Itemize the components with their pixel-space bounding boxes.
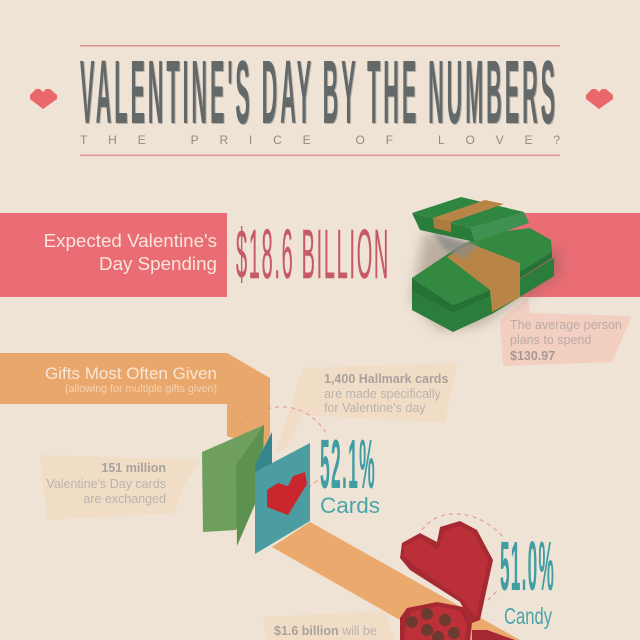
icon: heart candy box — [400, 521, 515, 640]
icon: stacks of money — [412, 197, 560, 332]
chocolates — [406, 608, 460, 640]
callout: 151 million: are exchanged — [83, 492, 166, 506]
gifts label: (allowing for multiple gifts given) — [65, 383, 217, 395]
icon: greeting card — [202, 425, 310, 554]
stat: cards percentage: Cards — [320, 493, 380, 518]
panel: gifts ribbon — [0, 353, 270, 450]
text: 52.1% — [320, 425, 376, 503]
upper stack — [412, 197, 529, 242]
gifts label — [45, 364, 217, 395]
callout: 151 million: Valentine's Day cards — [46, 477, 166, 491]
subtitle: THE PRICE OF LOVE? — [80, 133, 560, 147]
lower stack — [412, 228, 554, 332]
panel: expected spending band left — [0, 213, 227, 297]
icon: right heart — [586, 89, 613, 109]
callout: hallmark cards: 1,400 Hallmark cards — [324, 372, 448, 386]
stat: cards percentage — [320, 425, 380, 518]
callout: average spend: plans to spend — [510, 333, 591, 347]
spending label: Expected Valentine's — [44, 230, 217, 251]
callout: hallmark cards — [276, 363, 457, 452]
callout: 151 million: 151 million — [101, 461, 166, 475]
header rule bottom — [80, 154, 560, 156]
spending label — [44, 230, 217, 274]
ribbon diagonal — [272, 522, 520, 640]
callout: hallmark cards: are made specifically — [324, 387, 441, 401]
callout: average spend — [500, 297, 632, 366]
gifts label: Gifts Most Often Given — [45, 364, 217, 383]
callout: candy spending — [263, 611, 395, 640]
icon: left heart — [30, 89, 57, 109]
panel: expected spending band right — [480, 213, 640, 297]
spending label: Day Spending — [99, 253, 217, 274]
callout: average spend: The average person — [510, 318, 622, 332]
header rule top — [80, 45, 560, 47]
callout: hallmark cards: for Valentine's day — [324, 401, 426, 415]
callout: average spend: $130.97 — [510, 349, 555, 363]
dashed arc around cards — [240, 407, 328, 488]
stat: candy percentage: Candy — [504, 603, 552, 629]
dashed arc around candy — [422, 514, 504, 600]
callout: candy spending: $1.6 billion will be — [274, 624, 377, 638]
callout: 151 million — [40, 455, 200, 520]
stat: candy percentage — [500, 527, 555, 629]
